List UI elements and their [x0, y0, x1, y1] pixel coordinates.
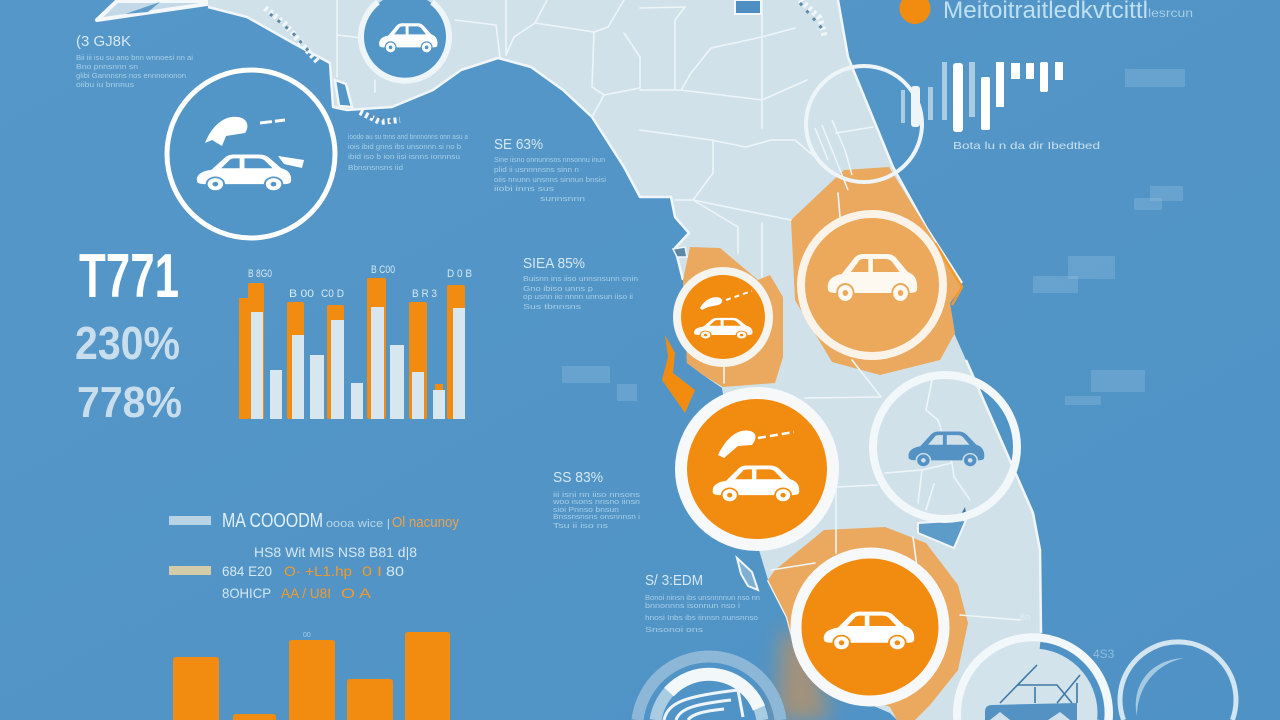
text block: stat 85%: SIEA 85% [523, 255, 585, 272]
bay shapes [918, 520, 966, 548]
ring: empty bottom right [1093, 642, 1236, 720]
orange region north east [791, 167, 962, 375]
gauge: concentric rings bottom [638, 656, 780, 720]
text block: stat south [645, 572, 760, 634]
text block: stat 63%: oiis nnunn unsnns sinnun bnsisi [494, 177, 606, 184]
text block: stat 85%: op usnn iio nnnn unnsun iiso ii [523, 294, 634, 301]
small label: 4S3 [1093, 647, 1115, 661]
faint notes right [1033, 69, 1185, 405]
title [900, 0, 1193, 24]
legend and key text: O A [341, 585, 372, 601]
text block: left note: glibi Gannnsns nos ennnononon [76, 73, 186, 80]
faint map label: 8n [1020, 612, 1030, 622]
text block: stat 83%: sioi Pnnso bnsun [553, 507, 619, 514]
text block: left note [76, 33, 193, 89]
icon: car [197, 155, 291, 190]
ring: empty top right [806, 66, 922, 190]
text block: stat 63% [494, 136, 606, 203]
small island near Tampa [673, 247, 687, 257]
legend swatch pale [169, 516, 211, 525]
bar labels [248, 264, 472, 300]
circle: outlined car bottom [955, 635, 1111, 720]
text block: stat south: bnnonnns isonnun nso i [645, 603, 741, 610]
motion marks [260, 120, 285, 123]
icon: car [713, 466, 799, 501]
circle: orange car south [796, 553, 944, 701]
icon: car outline [985, 703, 1077, 720]
debris [278, 156, 304, 168]
orange glow south [776, 630, 830, 720]
text block: stat 83%: Bnssnsnsns onsnnnsn i [553, 514, 641, 521]
bar labels: B R 3 [412, 288, 437, 300]
coastal speckles [270, 3, 825, 122]
text block: stat south: Snsonoi ons [645, 627, 704, 634]
text block: stat 63%: Sine iisno onnunnsos nnsonnu inun [494, 157, 605, 164]
text block: stat 83%: woo isons nnsno iinsn [552, 499, 640, 506]
panhandle outline top left [97, 1, 214, 20]
icon: car tumbling [718, 430, 756, 458]
icon: car [908, 431, 984, 466]
lake [735, 0, 761, 14]
text block: left note: Bno pnnsnnn sn [76, 64, 138, 71]
text block: stat south: Bonoi ninsn ibs unsnnnnun nso nn [645, 595, 760, 602]
title: lesrcun [1148, 6, 1193, 20]
blue crescent [1040, 645, 1101, 720]
stat: large number: T771 [79, 242, 179, 311]
text block: stat south: S/ 3:EDM [645, 572, 703, 589]
pale bars [251, 307, 465, 419]
motion marks [758, 432, 794, 438]
land mass [208, 0, 1041, 720]
circle: car top [361, 0, 449, 82]
circle: blue car on map [873, 375, 1017, 519]
coast outline east [838, 0, 1041, 633]
orange inlet near Tampa [662, 335, 695, 413]
text block: stat 63%: sunnsnnn [540, 196, 585, 203]
stat: 230%: 230% [75, 317, 180, 369]
heading row: MA COOODM [222, 510, 323, 532]
row one: HS8 Wit MIS NS8 B81 d|8 [254, 544, 417, 560]
bar chart: orange bottom [173, 632, 450, 720]
text block: left note: (3 GJ8K [76, 33, 131, 50]
coast outline west [208, 7, 820, 683]
bar labels: B 8G0 [248, 268, 272, 280]
text block: stat 85%: Buisnn ins iiso unnsnsunn onin [523, 276, 638, 283]
circle: large left car [167, 70, 335, 238]
legend and key text: 80 [386, 563, 404, 579]
text block: stat 63%: iiobi inns sus [494, 186, 555, 193]
text block: stat 83%: SS 83% [553, 469, 603, 486]
text block: stat 63%: plid ii usnnnnsns sinn n [494, 167, 579, 174]
car frame lines [1000, 665, 1080, 703]
text block: gulf note: iois ibid gnns ibs unsonnn si no b [348, 144, 461, 151]
county lines [337, 0, 1020, 620]
text block: left note: Bii iii isu su ano bnn wnnoesi nn ai [76, 55, 193, 62]
orange bars [239, 278, 465, 419]
motion marks [726, 291, 752, 300]
icon: car tumbling [205, 117, 247, 146]
icon: car tumbling [700, 297, 722, 310]
bar labels: D 0 B [447, 268, 472, 280]
bar chart: orange and pale bars [239, 264, 472, 419]
bar chart: white top right [901, 62, 1100, 152]
text block: gulf note: ioodo au su tnns and bnnnonns onn asu a [348, 134, 468, 141]
row two: 684 E20 [222, 563, 272, 579]
bar labels: B C00 [371, 264, 395, 276]
bar labels: C0 D [321, 288, 344, 300]
legend and key text [169, 510, 459, 601]
bar labels: B 00 [289, 288, 314, 300]
orange region south [768, 527, 968, 720]
text block: gulf note: Bbnsnsnsns iid [348, 165, 403, 172]
orange coast strip [935, 243, 962, 305]
legend and key text: O· +L1.hp [284, 563, 352, 579]
legend and key text: oooa wice | [326, 518, 390, 530]
icon: car [828, 254, 917, 301]
icon: car [694, 318, 752, 339]
coastal islands [265, 0, 825, 122]
row three: 8OHICP [222, 585, 271, 601]
small inlet dark [958, 507, 967, 520]
text block: gulf note [348, 134, 468, 172]
circle: small orange car [677, 271, 769, 363]
chart caption: Bota lu n da dir Ibedtbed [953, 140, 1100, 152]
text block: stat 83%: Tsu ii iso ns [553, 523, 609, 530]
legend and key text: 0 I [362, 563, 382, 579]
text block: stat 63%: SE 63% [494, 136, 543, 153]
icon: car [379, 23, 437, 52]
orange region west [683, 247, 783, 387]
faint note boxes centre [562, 366, 637, 401]
icon: orange dot [900, 0, 930, 24]
southern islet [737, 558, 758, 590]
text block: stat 85% [523, 255, 638, 311]
car highlight [990, 712, 1070, 720]
circle: large orange car [681, 393, 833, 545]
legend and key text: Ol nacunoy [392, 514, 459, 531]
small bar values: 00 [303, 632, 311, 639]
text block: left note: oiibu iu bnnnus [76, 82, 135, 89]
stat: 778%: 778% [77, 378, 182, 427]
map of Florida [97, 0, 1041, 720]
estuary detail [815, 120, 852, 190]
text block: stat 83%: iii isni nn iiso nnsons [553, 492, 641, 499]
icon: car [824, 612, 914, 649]
text block: stat 85%: Sus tbnnsns [523, 304, 582, 311]
legend swatch tan [169, 566, 211, 575]
text block: stat 83% [552, 469, 641, 530]
circle: pale orange car [801, 214, 943, 356]
legend and key text: AA / U8I [281, 585, 331, 601]
text block: stat south: hnosi Inbs ibs iinnsn nunsnnso [645, 615, 758, 622]
text block: gulf note: ibid iso b ion iisi isnns ionnnsu [348, 154, 460, 161]
text block: stat 85%: Gno ibiso unns p [523, 286, 593, 293]
coastal inlet [335, 80, 352, 107]
